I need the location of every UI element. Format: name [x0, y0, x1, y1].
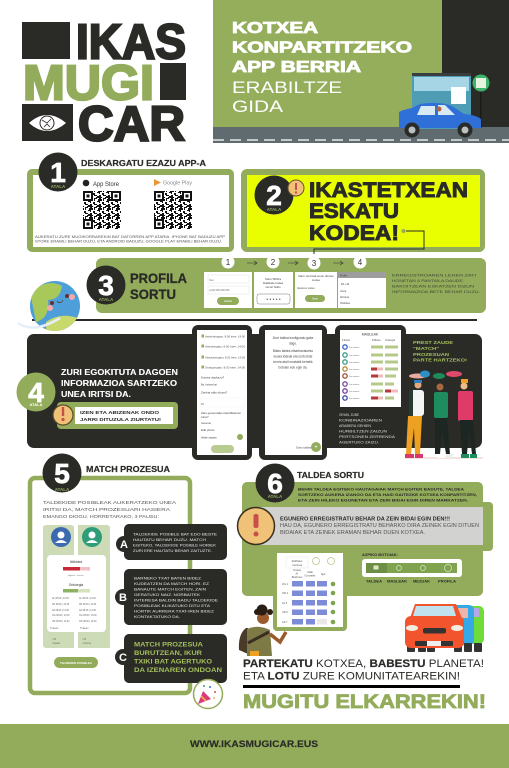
callout b: BANAUTE MATCH EGITEN, ZAIN	[134, 588, 207, 592]
phone: form: Asteartegatu: 8:00 irtee: 14:00	[205, 346, 246, 348]
profile cards: OR 08:00 | 14:30	[52, 621, 70, 623]
numbered steps: 4	[358, 258, 363, 267]
schedule table: AL 5	[282, 601, 288, 605]
step 5 badge: 5	[54, 458, 70, 489]
form screen 4: Izena	[340, 290, 347, 293]
step 1 text: STORE ERABILI BEHAR DUZU, ETA ANDROID BADUZU, GOOGLE PLAY ERABILI BEHAR DUZU.	[35, 240, 222, 244]
profile cards: AR 08:00 | 14:30	[79, 603, 97, 606]
phone: team empty: Bilatu taldea etkarbanatzeko	[273, 349, 313, 353]
step 5 badge: ATALA	[55, 487, 70, 492]
schedule table: Brahmen	[292, 575, 303, 579]
step 4 callout: IZEN ETA ABIZENAK ONDO	[80, 410, 160, 415]
form screen 3	[295, 272, 337, 308]
step 5 intro: IRITSI DA, MATCH PROZESUARI HASIERA	[43, 507, 171, 512]
callout c: C	[119, 652, 127, 664]
step 3 badge: 3	[98, 270, 114, 301]
profile cards: AZ 08:45 | 14:30	[79, 609, 97, 612]
callout b: POSIBLEAK KLIKATUKO DITU ETA	[134, 604, 211, 608]
phone: matches: Jon etxarri	[349, 383, 360, 386]
match prompt text	[413, 340, 467, 364]
step 4 badge: 4	[28, 377, 44, 408]
callout c: MATCH PROZESUA	[134, 642, 204, 648]
phone: form: Ba, kotxea bai	[201, 384, 217, 386]
phone: team empty: kuaza kideak eta sortu bide	[274, 354, 313, 358]
step 4 badge	[16, 372, 56, 412]
step 4 heading: UNEA IRITSI DA.	[61, 390, 131, 399]
phone: matches: Jon etxarri	[349, 390, 360, 393]
step 5 badge	[42, 454, 82, 492]
daily reminder: HAU DA, EGUNERO ERREGISTRATU BEHARKO DIRA ZEINEK EGIN DITUEN	[280, 523, 479, 529]
match prompt text: PROZESUAN	[413, 352, 450, 358]
step 1 heading: DESKARGATU EZAZU APP-A	[81, 158, 206, 168]
match prompt text: PREST ZAUDE	[413, 340, 454, 346]
three cars	[405, 604, 484, 652]
match list text: HURBILTZEN ZAIZUN	[339, 428, 387, 434]
connector arrow	[314, 229, 424, 254]
callout a: TALDEKIDE POSIBLE BAT EDO BESTE	[133, 532, 218, 536]
step 6 panel	[238, 464, 493, 631]
profile cards: • Gizona	[82, 643, 91, 645]
schedule table: Gonzalez	[305, 574, 316, 578]
callout a: A	[120, 539, 128, 551]
step 6 badge: 6	[267, 468, 283, 499]
callout b: KONTAKTATUKO DA.	[134, 615, 180, 619]
bottom buttons: PROFILA	[438, 580, 457, 584]
match list text: KONBINAZIOAREN	[339, 418, 382, 422]
logo: MUGI	[23, 55, 154, 110]
phone: form: Ostegungatu: 8:00 irtee: 14:00	[205, 366, 246, 370]
profile cards: Ordutegia	[69, 583, 83, 587]
closing slogan	[243, 658, 486, 713]
numbered steps: 3	[312, 259, 317, 268]
callout c: TXIKI BAT AGERTUKO	[134, 658, 212, 666]
profile cards: OG 08:00 | 14:30	[52, 615, 70, 617]
bottom buttons: MEZUAK	[413, 580, 431, 584]
schedule table: AR 6	[282, 610, 288, 614]
step 5 panel	[30, 454, 227, 708]
header banner	[213, 0, 509, 143]
profile cards: AL 08:00 | 14:30	[52, 597, 69, 600]
bottom buttons: AZPIKO BOTOIAK:	[362, 553, 398, 557]
road	[213, 127, 509, 143]
step 2 heading	[309, 179, 468, 245]
bus stop	[412, 73, 490, 129]
banner title: KONPARTITZEKO	[232, 40, 412, 56]
banner title	[232, 20, 412, 116]
profile cards: Trukean	[80, 627, 89, 630]
step 6 badge	[256, 464, 294, 502]
profile cards: OR 08:00 | 14:30	[79, 621, 97, 623]
profile cards: OG 08:00 | 14:30	[79, 615, 97, 617]
footer	[0, 724, 509, 768]
step 5 heading: MATCH PROZESUA	[86, 464, 170, 474]
schedule table: AZ 7	[282, 620, 288, 624]
form screen 4: ES +34	[341, 283, 350, 286]
match prompt text: PARTE HARTZEKO!	[413, 358, 467, 364]
schedule table: OR 2	[282, 591, 289, 595]
step 4 heading	[61, 368, 178, 399]
form screen 3: Ikastetxe kodea	[297, 287, 315, 290]
banner title: GIDA	[232, 98, 283, 116]
footer: WWW.IKASMUGICAR.EUS	[190, 739, 318, 749]
earth mascot	[18, 281, 80, 334]
schedule table: Al.	[295, 572, 299, 576]
bottom buttons	[362, 553, 462, 584]
step 2 badge: 2	[266, 180, 282, 211]
daily reminder	[238, 507, 483, 545]
form screen 3: kodea	[312, 278, 320, 282]
phone: form: Generoa	[201, 422, 211, 425]
form screen 4	[338, 272, 386, 308]
step 1 badge	[38, 152, 78, 192]
step 3 text: HONETAN 4 PANTAILA DAUDE.	[392, 279, 464, 283]
callout b: BARNEKO TXAT BATEN BIDEZ	[134, 576, 202, 580]
schedule table: Ajpi	[321, 572, 326, 576]
callout b: HORTIK AURRERA TXAT-IREN BIDEZ	[134, 610, 215, 614]
step 3 text	[392, 274, 480, 294]
phone: form: Ikhale zaparia	[201, 436, 217, 440]
phone: team empty: Zure taldea konfiguratu gabe	[273, 336, 314, 340]
callout a: HAUTATU BEHAR DUZU. MATCH	[133, 538, 207, 542]
phone: form: 10	[201, 403, 204, 406]
phone: form: Astelehengatu: 8:00 irtee: 14:00	[205, 336, 246, 338]
step 2 panel	[241, 169, 485, 254]
step 3 text: BAKOITZEAN ESKATZEN DIZUN	[392, 284, 474, 288]
step 6 text: ETA ZEIN HILEKO EGUNETAN ETA ZEIN BIDAI EGIN DIREN MARKATZEN.	[298, 498, 468, 502]
match list text	[339, 412, 395, 444]
step 1 badge: 1	[50, 157, 66, 188]
banner title: ERABILTZE	[232, 79, 342, 97]
step 4 callout: JARRI DITUZULA ZIURTATU!	[80, 417, 162, 422]
match prompt text: "MATCH"	[413, 346, 439, 352]
callout b: GERATUKO NAIZ. NORBAITEK	[134, 593, 201, 597]
profile cards: AR 08:00 | 14:30	[52, 603, 70, 606]
phone: team empty: +	[314, 445, 318, 451]
google play label	[154, 179, 192, 186]
step 6 text: BEHIN TALDEA EGITEKO HAUTAGAIAK MATCH EGITEN BADUTE, TALDEA	[298, 488, 465, 492]
step 2 heading: IKASTETXEAN	[309, 179, 468, 202]
step 3 heading	[130, 271, 187, 302]
callout c: DA IZENAREN ONDOAN	[134, 667, 223, 674]
banner title: KOTXEA	[232, 20, 318, 37]
phone: matches: MASLEAK	[362, 332, 379, 336]
logo	[22, 14, 186, 151]
step 5 intro	[43, 500, 177, 519]
step 2 badge	[254, 176, 294, 214]
step 4 panel	[16, 325, 483, 460]
profile cards: • 25	[82, 639, 87, 641]
student with backpack	[239, 604, 286, 656]
form screen 4: Abizena	[340, 296, 350, 299]
closing slogan: PARTEKATU KOTXEA, BABESTU PLANETA!	[243, 658, 484, 670]
callout b: INTERESA BALDIN BADU TALDEKIDE	[134, 598, 219, 602]
phone: form: Zein generotako identifikatzen	[201, 411, 241, 415]
closing slogan: MUGITU ELKARREKIN!	[243, 691, 486, 713]
step 3 heading: PROFILA	[130, 271, 187, 286]
profile cards: • Neska	[52, 643, 61, 645]
party icon	[194, 680, 222, 708]
form screen 4: Helbidea	[340, 302, 350, 305]
form screen 1: Izen	[209, 279, 214, 282]
app store label: App Store	[93, 182, 120, 188]
step 1 badge: ATALA	[51, 184, 66, 189]
app store label	[83, 180, 120, 188]
phone: matches: 8 tkoide	[342, 339, 351, 342]
step 1 text: AUKERATU ZURE MUGIKORRAREKIN BAT DATORREN APP ATARIA. IPHONE BAT BADUZU APP	[35, 235, 225, 239]
callout c	[115, 634, 227, 683]
step 2 heading: ESKATU	[309, 200, 399, 223]
phone: form: zara?	[201, 415, 209, 419]
phone: form	[192, 325, 252, 460]
bottom buttons: TALDEA	[366, 580, 383, 584]
profile cards	[43, 525, 110, 668]
step 4 heading: ZURI EGOKITUTA DAGOEN	[61, 368, 178, 377]
daily reminder: BIDAIAK ETA ZEINEK ERAMAN BEHAR DUEN KOTXEA.	[280, 530, 425, 536]
callout c: BURUTZEAN, IKUR	[134, 650, 203, 657]
step 4 badge: ATALA	[30, 402, 43, 407]
phone: matches: Jon etxarri	[349, 346, 360, 349]
schedule table	[273, 553, 347, 631]
warning icon	[288, 180, 304, 196]
form screen 2	[254, 272, 293, 308]
form screen 2: Sartu SMSra	[265, 277, 281, 281]
callout b	[115, 569, 227, 625]
form screen 2: bidalitako kodea	[263, 281, 284, 285]
closing slogan: ETA LOTU ZURE KOMUNITATEAREKIN!	[243, 670, 460, 682]
schedule table: Alaki	[307, 570, 313, 574]
google play qr	[154, 191, 192, 229]
step 1 text	[35, 235, 225, 244]
match list text: ORAIN, ZUBE	[339, 412, 359, 417]
phone: team empty: dago.	[289, 342, 297, 346]
callout b: KUDEATZEN DA MATCH HORI. EZ	[134, 582, 210, 586]
numbered steps: 2	[271, 258, 276, 267]
numbered steps: 1	[226, 258, 231, 267]
step 2 badge: ATALA	[267, 207, 282, 212]
callout a	[116, 524, 227, 560]
divider line	[32, 319, 477, 321]
blue car	[399, 103, 481, 138]
bottom buttons: MASLEAK	[387, 580, 408, 584]
phone: matches: Jon etxarri	[349, 361, 360, 364]
profile cards: AL 08:00 | 14:30	[79, 597, 96, 600]
form screen 1	[204, 272, 252, 308]
phone: team empty: botoian edo egin da.	[279, 366, 308, 370]
form screen 2: • • • • •	[266, 297, 281, 303]
daily reminder: EGUNERO ERREGISTRATU BEHAR DA ZEIN BIDAI EGIN DEN!!!	[280, 516, 450, 522]
step 4 callout	[53, 402, 178, 429]
logo: CAR	[78, 96, 185, 151]
form screen 2: zenurt hiditu	[265, 285, 281, 289]
phone: matches: Jon etxarri	[349, 397, 360, 400]
form screen 1: Jarraitu	[224, 300, 233, 303]
phone: form: Kotxea daukazu?	[201, 376, 225, 380]
phone: team empty	[259, 325, 327, 460]
banner title: APP BERRIA	[232, 59, 361, 76]
numbered steps	[222, 256, 366, 270]
step 5 intro: TALDEKIDE POSIBLEAK AUKERATZEKO UNEA	[43, 500, 177, 505]
step 5 intro: EMANGO DIOGU. HORRETARAKO, 3 PAUSU:	[43, 514, 159, 519]
form screen 4: Profila	[340, 274, 348, 278]
callout b: B	[119, 592, 127, 604]
form screen 1: (+34) 000 000 000	[209, 289, 230, 292]
step 3 panel	[86, 256, 486, 313]
logo: IKAS	[76, 14, 186, 69]
step 2 heading: KODEA!	[309, 222, 399, 245]
step 1 panel	[27, 152, 234, 252]
phone: matches: Jon etxarri	[349, 354, 360, 357]
phone: matches: Jon etxarri	[349, 368, 360, 371]
phone: team empty: Sortu taldea	[296, 446, 312, 450]
step 3 text: INFORMAZIOA BETE BEHAR DUZU.	[392, 290, 480, 294]
profile cards: AZ 08:00 | 14:30	[52, 609, 70, 612]
match list text: AGERTUKO ZAIZU.	[339, 440, 379, 444]
schedule table: OG 1	[282, 582, 289, 586]
profile cards: Ibilbidea	[70, 560, 82, 564]
profile cards: Ajpeita - Ioanas	[68, 574, 85, 577]
form screen 3: Sartu zentroak eman dizuten	[298, 274, 334, 278]
phone: matches: Ibilbidea	[372, 340, 381, 342]
step 6 badge: ATALA	[268, 494, 283, 499]
phone: matches	[335, 325, 406, 415]
profile cards: Trukean	[50, 627, 59, 630]
schedule table: Teresa	[293, 568, 301, 572]
phone: form: Asteazkengatu: 8:00 irtee: 14:00	[205, 356, 246, 360]
step 3 badge: ATALA	[99, 297, 114, 302]
step 3 text: ERREGISTROAREN LEHEN ZATI	[392, 274, 476, 278]
google play label: Google Play	[163, 180, 192, 186]
step 6 heading: TALDEA SORTU	[297, 470, 364, 480]
phone: team empty: berria atal honetatik behetik	[273, 360, 313, 364]
app store qr	[83, 191, 121, 229]
phone: form: Zenbat alde dituzu?	[201, 390, 228, 394]
callout a: EGITEKO, TALDEKIDE POSIBLE HORIEK	[133, 544, 217, 548]
step 6 text: SORTZEKO AUKERA IZANGO DA ETA HASI GAITEZKE KOTXEA KONPARTITZEN,	[298, 493, 477, 497]
schedule table: 2025eko	[292, 559, 303, 563]
schedule table: martxoa	[292, 563, 302, 567]
match list text: PERTSONEN ZERRENDA	[339, 434, 395, 439]
callout a: ZURI ERE HAUTATU BEHAR ZAITUZTE.	[133, 549, 212, 553]
phone: matches: Ordutegia	[385, 339, 396, 342]
step 3 heading: SORTU	[130, 287, 176, 302]
profile cards: • 25	[52, 639, 57, 641]
step 3 badge	[86, 266, 126, 304]
form screen 3: Sartu	[312, 298, 319, 300]
group of people	[405, 370, 483, 458]
profile cards: TALDEKIDE POSIBLEA	[60, 661, 93, 665]
step 6 text	[298, 488, 477, 502]
step 4 heading: INFORMAZIOA SARTZEKO	[61, 379, 177, 388]
phone: form: Edit photo	[201, 428, 215, 432]
match list text: ARABERA GEHIEN	[339, 423, 371, 428]
phone: matches: Jon etxarri	[349, 375, 360, 378]
